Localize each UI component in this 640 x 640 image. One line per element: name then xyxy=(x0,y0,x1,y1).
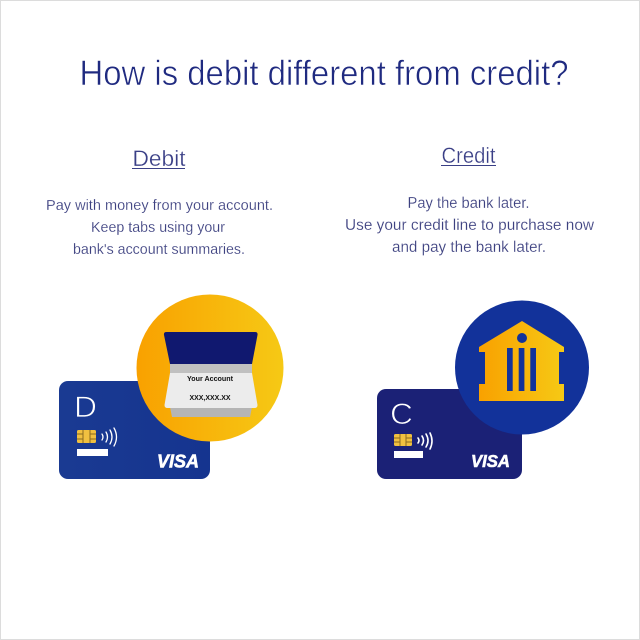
account number: XXX,XXX.XX xyxy=(190,393,230,402)
letter C: C xyxy=(390,398,413,431)
letter D: D xyxy=(74,391,97,424)
chip icon xyxy=(394,434,412,446)
debit card illustration xyxy=(59,294,284,479)
visa logo: VISA xyxy=(157,452,199,472)
bank icon xyxy=(479,321,564,401)
panel: credit text xyxy=(345,143,595,256)
credit description xyxy=(345,195,595,256)
credit description: Pay the bank later. xyxy=(408,195,530,212)
debit description: Keep tabs using your xyxy=(91,219,225,236)
panel: debit text xyxy=(46,146,273,258)
credit description: Use your credit line to purchase now xyxy=(345,217,595,234)
gold circle with account box xyxy=(136,294,284,442)
contactless icon xyxy=(102,428,116,446)
chip icon xyxy=(77,430,96,443)
credit card xyxy=(377,389,522,479)
account box icon xyxy=(164,332,258,417)
heading: Credit: Credit xyxy=(442,143,496,168)
debit description: bank's account summaries. xyxy=(73,241,245,258)
visa logo: VISA xyxy=(471,451,510,471)
credit description: and pay the bank later. xyxy=(392,239,546,256)
debit description xyxy=(46,197,273,258)
heading: Debit: Debit xyxy=(132,146,186,171)
credit card illustration xyxy=(377,300,589,479)
debit card xyxy=(59,381,210,479)
account label: Your Account xyxy=(187,374,233,383)
debit description: Pay with money from your account. xyxy=(46,197,273,214)
contactless icon xyxy=(418,433,432,449)
title: How is debit different from credit? xyxy=(80,54,568,93)
white bar xyxy=(394,451,423,458)
blue circle with bank xyxy=(455,300,589,434)
white bar xyxy=(77,449,108,456)
